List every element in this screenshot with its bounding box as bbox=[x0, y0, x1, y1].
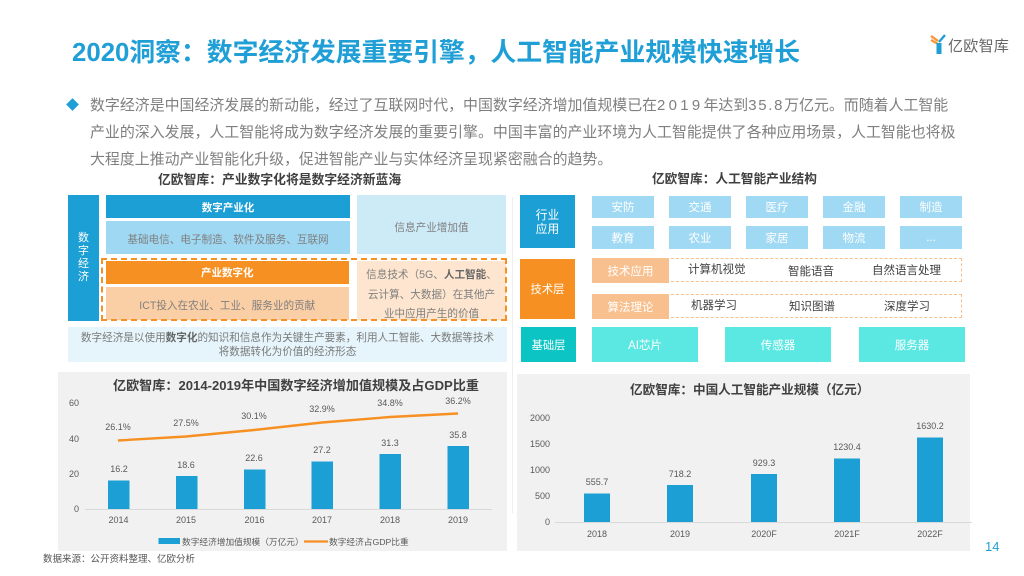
y axis labels: 2000 bbox=[530, 413, 550, 423]
tile: AI芯片: AI芯片 bbox=[628, 340, 662, 352]
dashed outline bbox=[100, 258, 506, 321]
tile: 金融 bbox=[823, 196, 885, 218]
logo bbox=[930, 34, 1009, 55]
tile: 农业: 农业 bbox=[688, 232, 712, 244]
label: 算法理论: 算法理论 bbox=[608, 302, 654, 314]
share value labels bbox=[105, 396, 471, 432]
tile: 金融: 金融 bbox=[842, 202, 866, 214]
tile: 物流 bbox=[823, 226, 885, 249]
layer: 技术层 bbox=[520, 259, 575, 318]
definition note: 数字经济是以使用数字化的知识和信息作为关键生产要素，利用人工智能、大数据等技术 bbox=[81, 332, 494, 344]
item: 深度学习: 深度学习 bbox=[884, 301, 930, 313]
side label: 数字经济: 济 bbox=[78, 271, 89, 283]
tile: 家居 bbox=[746, 226, 808, 249]
y axis labels: 500 bbox=[535, 491, 550, 501]
bar value labels: 18.6 bbox=[177, 460, 195, 470]
heading: digital economy: 亿欧智库：产业数字化将是数字经济新蓝海 bbox=[158, 172, 401, 187]
heading: AI structure: 亿欧智库：人工智能产业结构 bbox=[652, 172, 817, 186]
bar value labels bbox=[586, 421, 944, 487]
y axis labels: 0 bbox=[545, 517, 550, 527]
intro text block: 产业的深入发展，人工智能将成为数字经济发展的重要引擎。中国丰富的产业环境为人工智能提供了各种应用场景，人工智能也将极 bbox=[90, 124, 955, 141]
item: 自然语言处理: 自然语言处理 bbox=[872, 265, 941, 277]
y axis labels: 0 bbox=[74, 504, 79, 514]
bar value labels: 929.3 bbox=[753, 458, 775, 468]
y axis labels bbox=[69, 398, 79, 514]
layer: 行业应用: 行业 bbox=[536, 208, 559, 222]
dashed row: tech applications bbox=[661, 258, 962, 282]
x axis labels: 2019 bbox=[448, 515, 468, 525]
item: 知识图谱: 知识图谱 bbox=[789, 301, 835, 313]
bar value labels: 22.6 bbox=[245, 453, 263, 463]
x axis labels: 2017 bbox=[312, 515, 332, 525]
share value labels: 36.2% bbox=[445, 396, 471, 406]
side label: 数字经济: 字 bbox=[78, 245, 89, 257]
box: IT value bbox=[357, 261, 506, 320]
tile: more: ... bbox=[926, 232, 936, 244]
bar value labels: 1230.4 bbox=[833, 442, 861, 452]
box: ICT contribution bbox=[106, 286, 349, 320]
panel: AI market chart bbox=[517, 374, 970, 551]
tile: 传感器: 传感器 bbox=[761, 340, 795, 352]
bar value labels: 16.2 bbox=[110, 464, 128, 474]
tile: 交通 bbox=[669, 196, 731, 218]
tile: 医疗 bbox=[746, 196, 808, 218]
bars bbox=[108, 446, 469, 509]
side label: 数字经济: 数 bbox=[78, 232, 89, 244]
bar value labels: 555.7 bbox=[586, 477, 608, 487]
title: 2020洞察：数字经济发展重要引擎，人工智能产业规模快速增长 bbox=[72, 39, 800, 67]
box: information industry value added: 信息产业增加值 bbox=[394, 222, 469, 234]
x axis line bbox=[85, 508, 492, 510]
layer: 基础层 bbox=[521, 327, 576, 362]
box: information industry value added bbox=[357, 195, 506, 254]
data source: 数据来源：公开资料整理、亿欧分析 bbox=[43, 554, 195, 565]
box: ICT contribution: ICT投入在农业、工业、服务业的贡献 bbox=[139, 300, 315, 312]
side label: 数字经济 bbox=[68, 195, 99, 321]
label: 算法理论 bbox=[592, 294, 669, 319]
intro text block: 大程度上推动产业智能化升级，促进智能产业与实体经济呈现紧密融合的趋势。 bbox=[90, 151, 612, 168]
side label: 数字经济: 经 bbox=[78, 258, 89, 270]
box: digital industry contents bbox=[106, 221, 350, 254]
tile: 制造: 制造 bbox=[920, 202, 942, 214]
panel: digital economy chart bbox=[58, 372, 507, 551]
legend: 数字经济增加值规模（万亿元） bbox=[182, 536, 304, 547]
box: IT value: 业中应用产生的价值 bbox=[384, 308, 479, 320]
x axis labels: 2015 bbox=[176, 515, 196, 525]
tile: 医疗: 医疗 bbox=[766, 202, 788, 214]
box: digital industry contents: 基础电信、电子制造、软件及服务、互联网 bbox=[127, 234, 329, 246]
bar value labels bbox=[110, 430, 467, 474]
bar value labels: 1630.2 bbox=[916, 421, 944, 431]
x axis labels: 2020F bbox=[751, 529, 777, 539]
label: 技术应用: 技术应用 bbox=[608, 266, 654, 278]
tile: 教育: 教育 bbox=[612, 232, 634, 244]
item: 计算机视觉: 计算机视觉 bbox=[688, 264, 746, 276]
header: 数字产业化 bbox=[106, 195, 350, 218]
tile: 家居: 家居 bbox=[766, 232, 788, 244]
bar value labels: 718.2 bbox=[669, 469, 691, 479]
definition note bbox=[68, 327, 507, 362]
x axis labels: 2021F bbox=[834, 529, 860, 539]
chart title: 亿欧智库：中国人工智能产业规模（亿元） bbox=[630, 382, 869, 397]
tile: 制造 bbox=[900, 196, 962, 218]
y axis labels: 20 bbox=[69, 469, 79, 479]
y axis labels: 40 bbox=[69, 434, 79, 444]
tile: 交通: 交通 bbox=[688, 202, 712, 214]
share value labels: 27.5% bbox=[173, 418, 199, 428]
tile: 服务器: 服务器 bbox=[895, 340, 929, 352]
share value labels: 30.1% bbox=[241, 411, 267, 421]
tile: 教育 bbox=[592, 226, 654, 249]
share value labels: 32.9% bbox=[309, 404, 335, 414]
x axis labels bbox=[108, 515, 468, 525]
tile: 传感器 bbox=[725, 327, 831, 362]
x axis line bbox=[555, 522, 972, 524]
y axis labels bbox=[530, 413, 550, 527]
y axis labels: 1000 bbox=[530, 465, 550, 475]
label: 技术应用 bbox=[592, 258, 669, 283]
x axis labels: 2018 bbox=[380, 515, 400, 525]
icon: logo mark bbox=[930, 34, 946, 54]
intro text block bbox=[90, 97, 955, 168]
bar value labels: 31.3 bbox=[381, 438, 399, 448]
dashed row: algorithms bbox=[661, 294, 962, 318]
intro text block: 数字经济是中国经济发展的新动能，经过了互联网时代，中国数字经济增加值规模已在2019年达到35.8万亿元。而随着人工智能 bbox=[90, 97, 948, 114]
panel: AI industry structure bbox=[520, 195, 965, 362]
bar value labels: 35.8 bbox=[449, 430, 467, 440]
layer: 技术层: 技术层 bbox=[531, 284, 564, 296]
layer: 行业应用 bbox=[520, 195, 575, 248]
item: 机器学习: 机器学习 bbox=[691, 300, 737, 312]
tile: 安防 bbox=[592, 196, 654, 218]
x axis labels: 2022F bbox=[917, 529, 943, 539]
x axis labels: 2014 bbox=[108, 515, 129, 525]
share value labels: 34.8% bbox=[377, 398, 403, 408]
divider bbox=[512, 197, 513, 513]
item: 智能语音: 智能语音 bbox=[788, 266, 834, 278]
logo wordmark: 亿欧智库 bbox=[948, 38, 1009, 55]
x axis labels bbox=[587, 529, 943, 539]
header: 产业数字化 bbox=[106, 261, 349, 284]
tile: 服务器 bbox=[859, 327, 965, 362]
legend bbox=[158, 536, 409, 547]
share line bbox=[118, 414, 458, 440]
tile: 农业 bbox=[669, 226, 731, 249]
x axis labels: 2016 bbox=[244, 515, 265, 525]
tile: 安防: 安防 bbox=[612, 202, 634, 214]
tile: more bbox=[900, 226, 962, 249]
layer: 行业应用: 应用 bbox=[536, 222, 559, 236]
bars bbox=[584, 438, 943, 522]
x axis labels: 2018 bbox=[587, 529, 607, 539]
layer: 基础层: 基础层 bbox=[532, 340, 565, 352]
tile: AI芯片 bbox=[592, 327, 698, 362]
box: IT value: 信息技术（5G、人工智能、 bbox=[366, 269, 497, 281]
chart title: 亿欧智库：2014-2019年中国数字经济增加值规模及占GDP比重 bbox=[113, 377, 479, 393]
page number: 14 bbox=[985, 539, 999, 554]
header: 数字产业化: 数字产业化 bbox=[202, 202, 254, 214]
panel: digital economy structure bbox=[68, 195, 507, 362]
bar value labels: 27.2 bbox=[313, 445, 331, 455]
y axis labels: 1500 bbox=[530, 439, 550, 449]
y axis labels: 60 bbox=[69, 398, 79, 408]
legend: 数字经济占GDP比重 bbox=[329, 536, 409, 547]
header: 产业数字化: 产业数字化 bbox=[201, 267, 254, 279]
share value labels: 26.1% bbox=[105, 422, 131, 432]
box: IT value: 云计算、大数据）在其他产 bbox=[368, 289, 495, 301]
tile: 物流: 物流 bbox=[842, 232, 866, 244]
x axis labels: 2019 bbox=[670, 529, 690, 539]
definition note: 将数据转化为价值的经济形态 bbox=[219, 346, 356, 358]
icon: diamond bullet bbox=[66, 98, 79, 111]
